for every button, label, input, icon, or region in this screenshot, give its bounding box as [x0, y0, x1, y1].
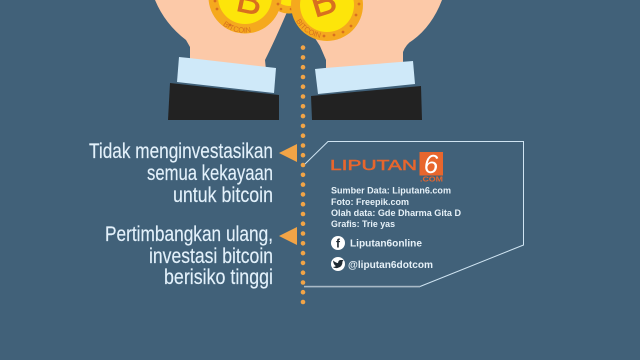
facebook handle: Liputan6online [350, 238, 422, 250]
credits text: Foto: Freepik.com [331, 197, 409, 208]
logo: Liputan6 [330, 149, 443, 184]
arrow: first tip [279, 144, 297, 162]
text block: second tip: berisiko tinggi [164, 265, 273, 289]
logo square with 6: 6 [424, 149, 439, 179]
credits text [331, 186, 461, 230]
logo suffix: .COM [420, 176, 443, 184]
logo wordmark: LIPUTAN [330, 157, 417, 174]
text block: second tip [105, 222, 273, 289]
coin: left [208, 0, 282, 34]
coin: left: BITCOIN [223, 21, 251, 33]
arrow: second tip [279, 227, 297, 245]
left cuff [177, 57, 276, 93]
credits text: Grafis: Trie yas [331, 219, 395, 230]
dotted vertical divider [301, 45, 305, 304]
credits panel outline [305, 142, 524, 286]
icon: twitter [331, 257, 345, 271]
left hand [155, 0, 290, 70]
coin: right: BITCOIN [296, 18, 321, 38]
illustration: hands holding bitcoins [155, 0, 442, 120]
right hand [288, 0, 442, 70]
coin: right [291, 0, 363, 41]
text block: first tip: untuk bitcoin [173, 183, 273, 207]
text block: second tip: Pertimbangkan ulang, [105, 222, 273, 246]
text block: first tip: Tidak menginvestasikan [89, 139, 273, 163]
left sleeve [168, 83, 279, 120]
icon: facebook [331, 236, 345, 250]
text block: first tip: semua kekayaan [147, 161, 273, 185]
icon: facebook: f [336, 236, 341, 250]
text block: first tip [89, 139, 273, 207]
text block: second tip: investasi bitcoin [149, 244, 273, 268]
credits panel bottom rule [304, 286, 420, 287]
twitter handle: @liputan6dotcom [348, 259, 433, 271]
coin: middle [266, 0, 312, 14]
right cuff [315, 61, 415, 94]
right sleeve [311, 86, 422, 120]
credits text: Sumber Data: Liputan6.com [331, 186, 451, 196]
credits text: Olah data: Gde Dharma Gita D [331, 208, 461, 219]
